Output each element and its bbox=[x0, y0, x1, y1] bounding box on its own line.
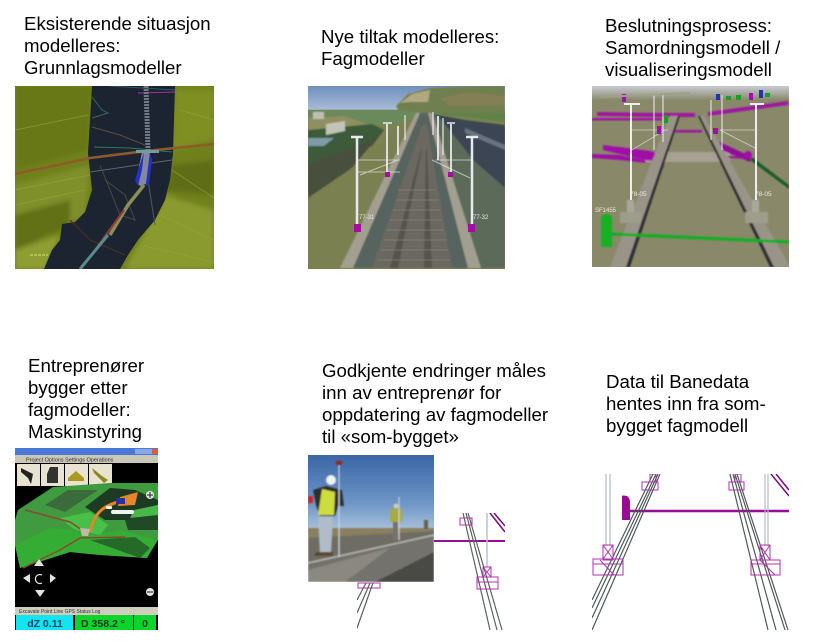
image: machine control screen: 0 bbox=[142, 618, 148, 630]
caption: banedata: hentes inn fra som- bbox=[606, 393, 766, 414]
image: coordination model: 78-05 bbox=[755, 191, 772, 198]
caption: som-bygget: til «som-bygget» bbox=[322, 426, 459, 447]
caption: fagmodeller: Fagmodeller bbox=[321, 48, 425, 69]
caption: samordningsmodell: Beslutningsprosess: bbox=[605, 15, 772, 36]
caption: maskinstyring: bygger etter bbox=[28, 377, 128, 398]
image: machine control screen: D 358.2 ° bbox=[81, 618, 125, 630]
caption: grunnlagsmodeller: Grunnlagsmodeller bbox=[24, 57, 182, 78]
image: machine control screen bbox=[15, 448, 158, 630]
surveyor back bbox=[390, 509, 402, 522]
caption: fagmodeller: Nye tiltak modelleres: bbox=[321, 26, 499, 47]
navigation arrows bbox=[23, 491, 154, 597]
image: wireframe track behind photo bbox=[357, 513, 505, 630]
image: coordination model: SF1455 bbox=[595, 208, 617, 214]
image: machine control screen: dZ 0.11 bbox=[27, 618, 63, 630]
caption: banedata: Data til Banedata bbox=[606, 371, 750, 392]
readouts bbox=[16, 615, 73, 630]
right side bbox=[432, 113, 505, 122]
window title bar bbox=[15, 448, 158, 455]
image: coordination model: 78-05 bbox=[630, 191, 647, 198]
image: wireframe track with purple pipe bbox=[592, 474, 789, 630]
caption: grunnlagsmodeller: modelleres: bbox=[24, 35, 120, 56]
caption: banedata: bygget fagmodell bbox=[606, 415, 748, 436]
tabs bbox=[15, 607, 158, 615]
tracks bbox=[610, 116, 678, 267]
caption: som-bygget: inn av entreprenør for bbox=[322, 382, 501, 403]
caption: som-bygget: oppdatering av fagmodeller bbox=[322, 404, 548, 425]
green pipe and post bbox=[612, 234, 789, 242]
dark corridor bbox=[44, 86, 175, 269]
image: railway track model: 77-32 bbox=[473, 215, 489, 221]
image: railway track model bbox=[308, 86, 505, 269]
caption: samordningsmodell: Samordningsmodell / bbox=[605, 37, 781, 58]
image: machine control screen: Excavate Point Line GPS Status Log bbox=[19, 609, 101, 615]
caption: grunnlagsmodeller: Eksisterende situasjon bbox=[24, 13, 211, 34]
caption: maskinstyring: Entreprenører bbox=[28, 355, 144, 376]
menu bar bbox=[15, 455, 158, 463]
image: machine control screen: Project Options Settings Operations bbox=[26, 458, 114, 464]
caption: som-bygget: Godkjente endringer måles bbox=[322, 360, 546, 381]
image: surveyors photo bbox=[308, 455, 434, 582]
foundations bbox=[627, 200, 634, 213]
image: terrain model with river corridor bbox=[15, 86, 214, 269]
image: railway track model: 77-31 bbox=[359, 215, 375, 221]
track bbox=[353, 113, 468, 268]
surveyor front bbox=[313, 486, 344, 516]
caption: maskinstyring: fagmodeller: bbox=[28, 399, 131, 420]
toolbar icons bbox=[17, 464, 112, 486]
caption: maskinstyring: Maskinstyring bbox=[28, 421, 142, 442]
hills bbox=[395, 86, 505, 113]
caption: samordningsmodell: visualiseringsmodell bbox=[605, 59, 772, 80]
image: coordination model bbox=[592, 86, 790, 267]
